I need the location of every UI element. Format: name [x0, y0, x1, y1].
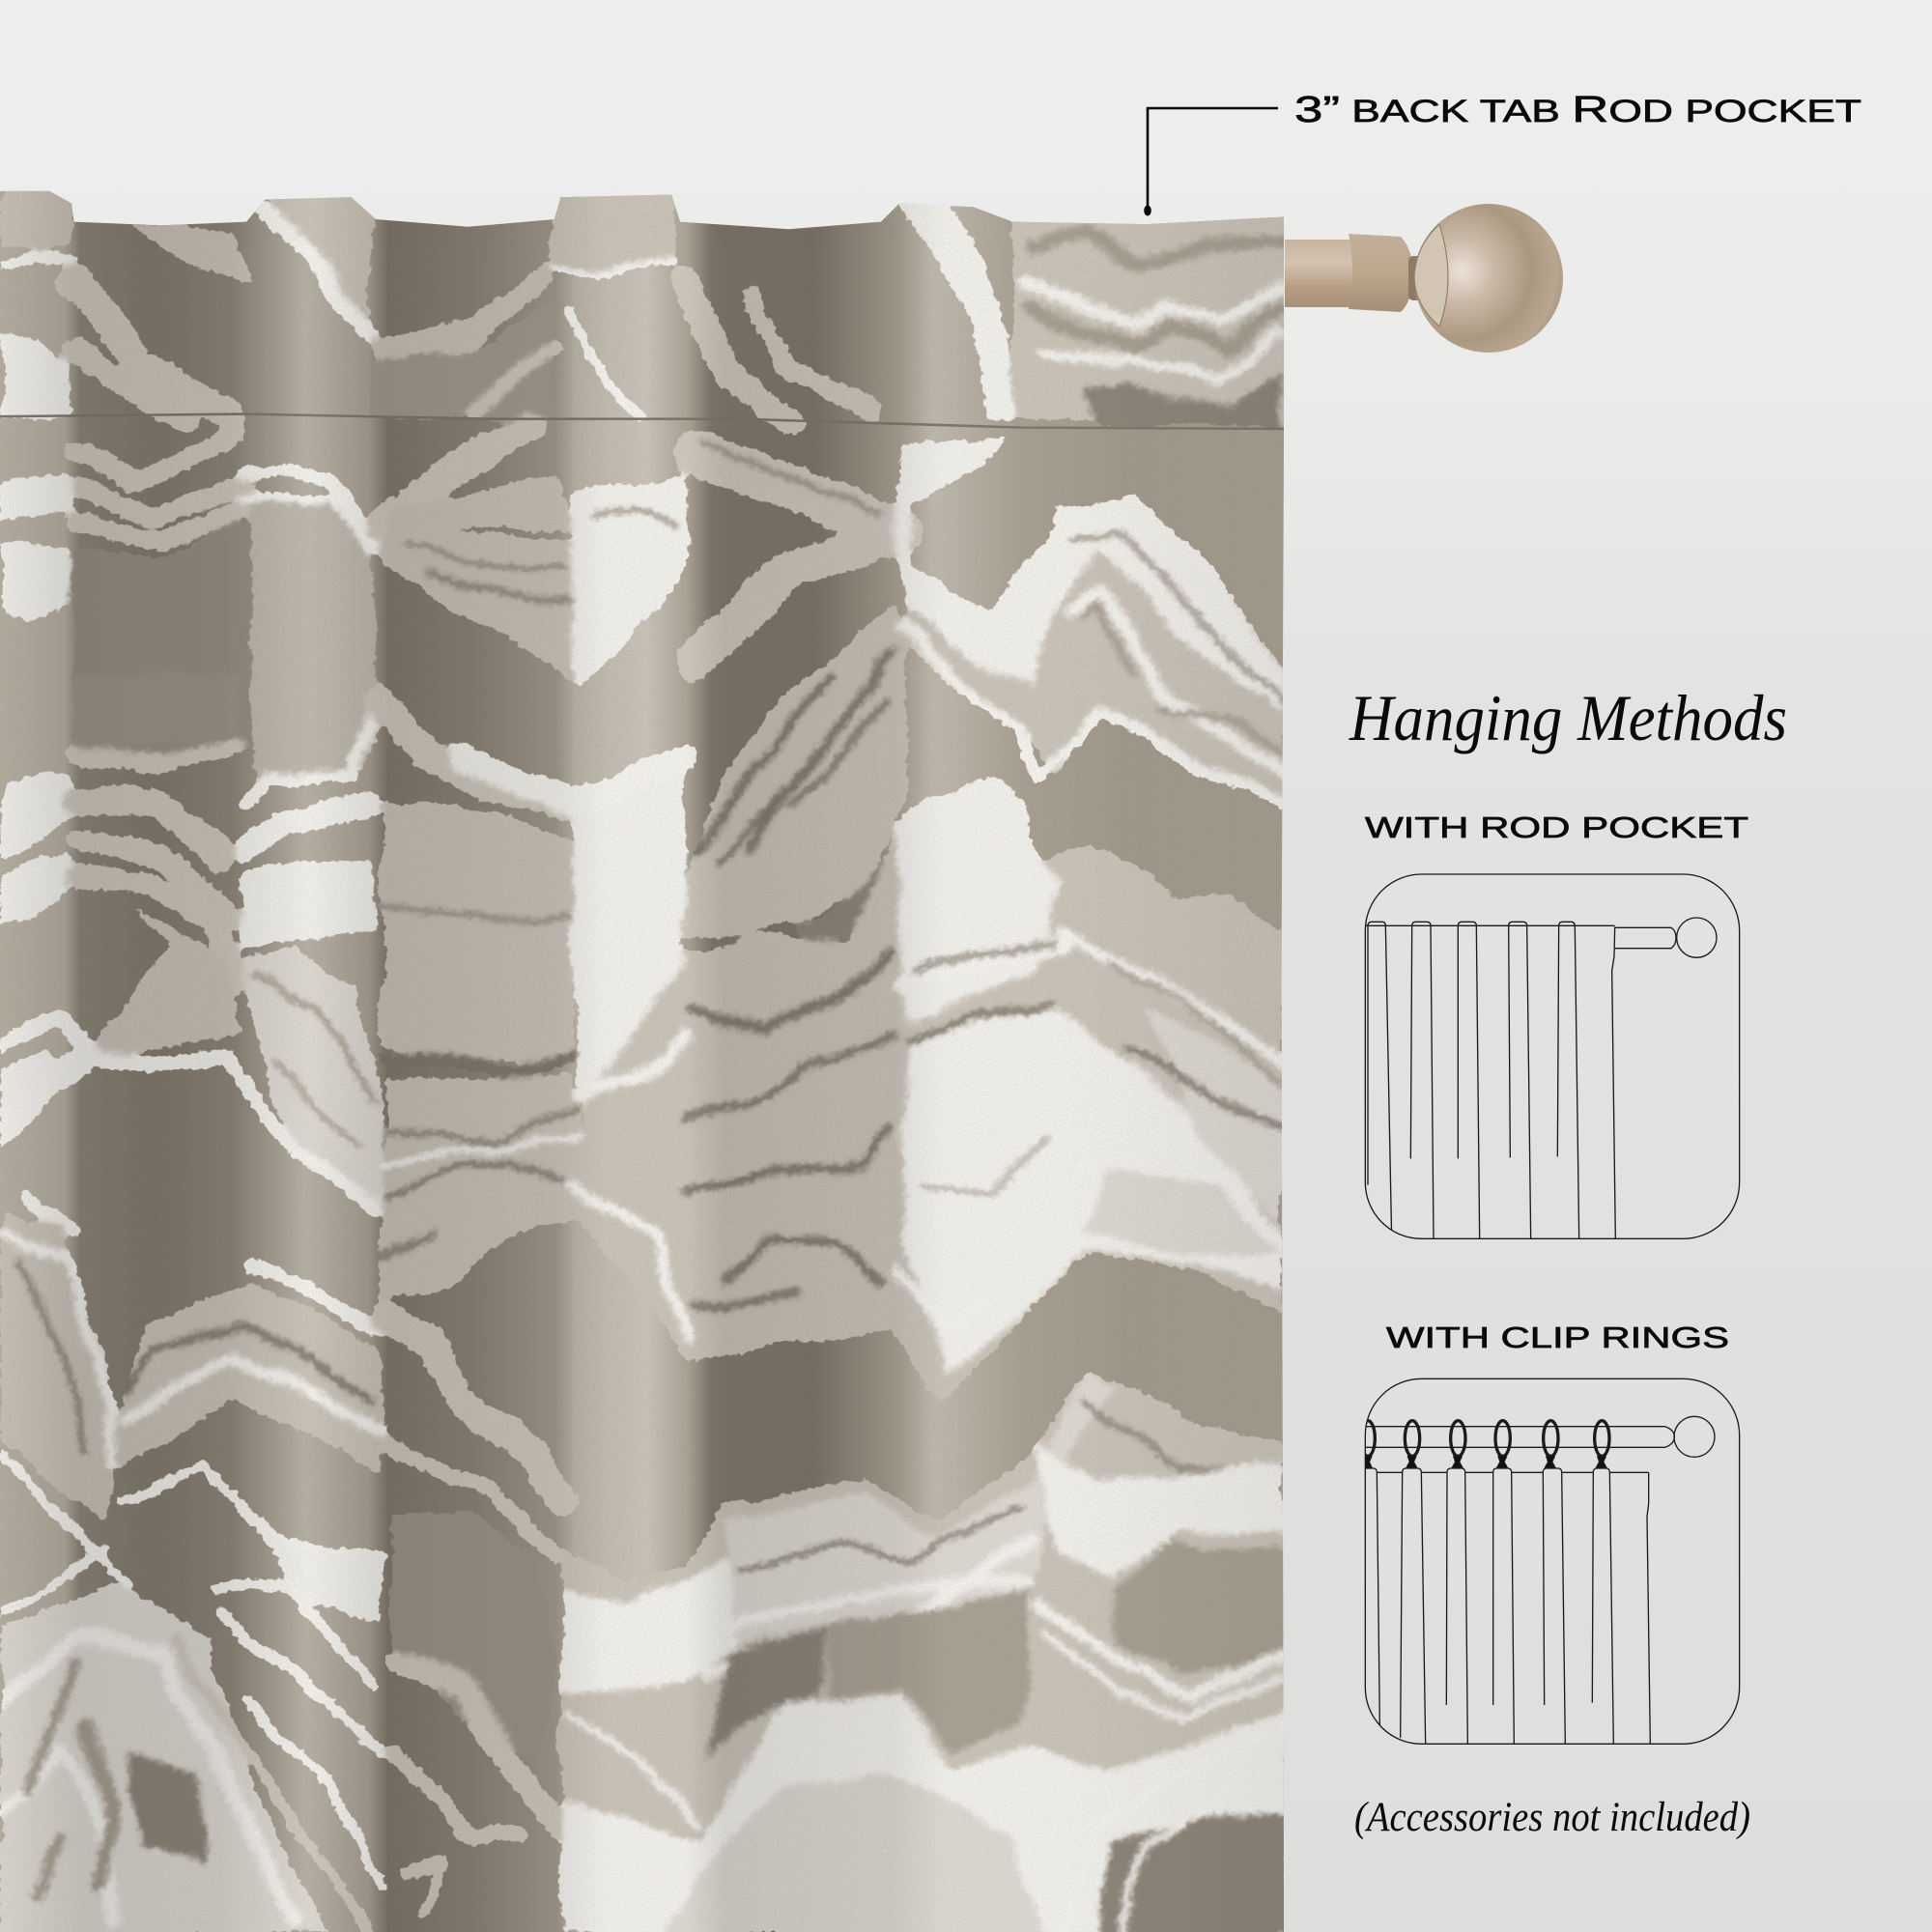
left pleat bands	[0, 770, 74, 863]
icon: rod pocket hanging diagram	[1365, 874, 1740, 1239]
white column	[573, 754, 685, 1109]
label: with rod pocket: WITH ROD POCKET	[1365, 810, 1748, 844]
pleat shade overlay	[0, 148, 1293, 1932]
callout label: 3” BACK TAB R OD POCKET	[1294, 90, 1861, 130]
strand left	[91, 1016, 243, 1059]
top header zone	[0, 185, 71, 252]
large right mass	[579, 780, 1284, 1404]
callout leader line	[1144, 108, 1278, 216]
heading: hanging methods: Hanging Methods	[1349, 681, 1787, 754]
right side swirl	[899, 496, 1288, 804]
fabric grain	[0, 148, 1293, 1932]
note: accessories not included: (Accessories not included)	[1354, 1795, 1750, 1840]
centre gray	[376, 702, 573, 807]
lower left	[0, 1213, 124, 1528]
mid valley diagonals	[694, 453, 892, 529]
icon: clip rings hanging diagram	[1361, 1378, 1740, 1744]
pleat 205-305	[242, 696, 376, 801]
marble strata	[0, 185, 1288, 1932]
pleat shading base	[0, 148, 1293, 1932]
bottom mass	[560, 1693, 1288, 1932]
dark oval pleat	[388, 1318, 560, 1502]
below stitch, left	[74, 434, 234, 483]
label: with clip rings: WITH CLIP RINGS	[1386, 1321, 1729, 1354]
stitch line	[0, 414, 1284, 429]
stripes of lower middle valley	[579, 1035, 685, 1096]
curtain panel with marble jacquard pattern	[0, 148, 1293, 1932]
centre V	[382, 527, 579, 680]
curtain rod with ball finial	[1285, 204, 1563, 353]
lower right mountains	[560, 1373, 1288, 1841]
